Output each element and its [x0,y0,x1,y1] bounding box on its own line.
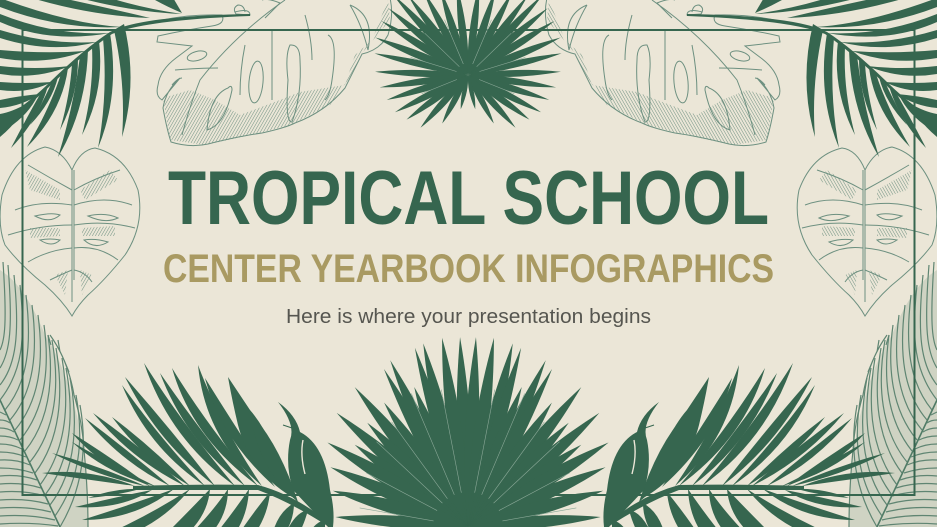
terminal broad leaf [278,402,334,527]
top-right line-art monstera leaf [545,0,780,146]
subtitle: CENTER YEARBOOK INFOGRAPHICS [163,247,774,291]
tagline: Here is where your presentation begins [286,306,651,328]
bottom centre fan palm [324,337,612,527]
top centre fan palm [374,0,562,130]
bottom-right palm frond [603,363,895,527]
top-left line-art monstera leaf [157,0,392,146]
bottom-left palm frond [42,363,334,527]
title: TROPICAL SCHOOL [168,156,769,241]
left line-art heart-shaped monstera leaf [0,147,140,316]
top-right palm frond [687,0,937,157]
right line-art heart-shaped monstera leaf [797,147,937,316]
bottom-left feathered line-art leaf [0,262,88,527]
top-left palm frond [0,0,250,157]
bottom-right feathered line-art leaf [849,262,937,527]
